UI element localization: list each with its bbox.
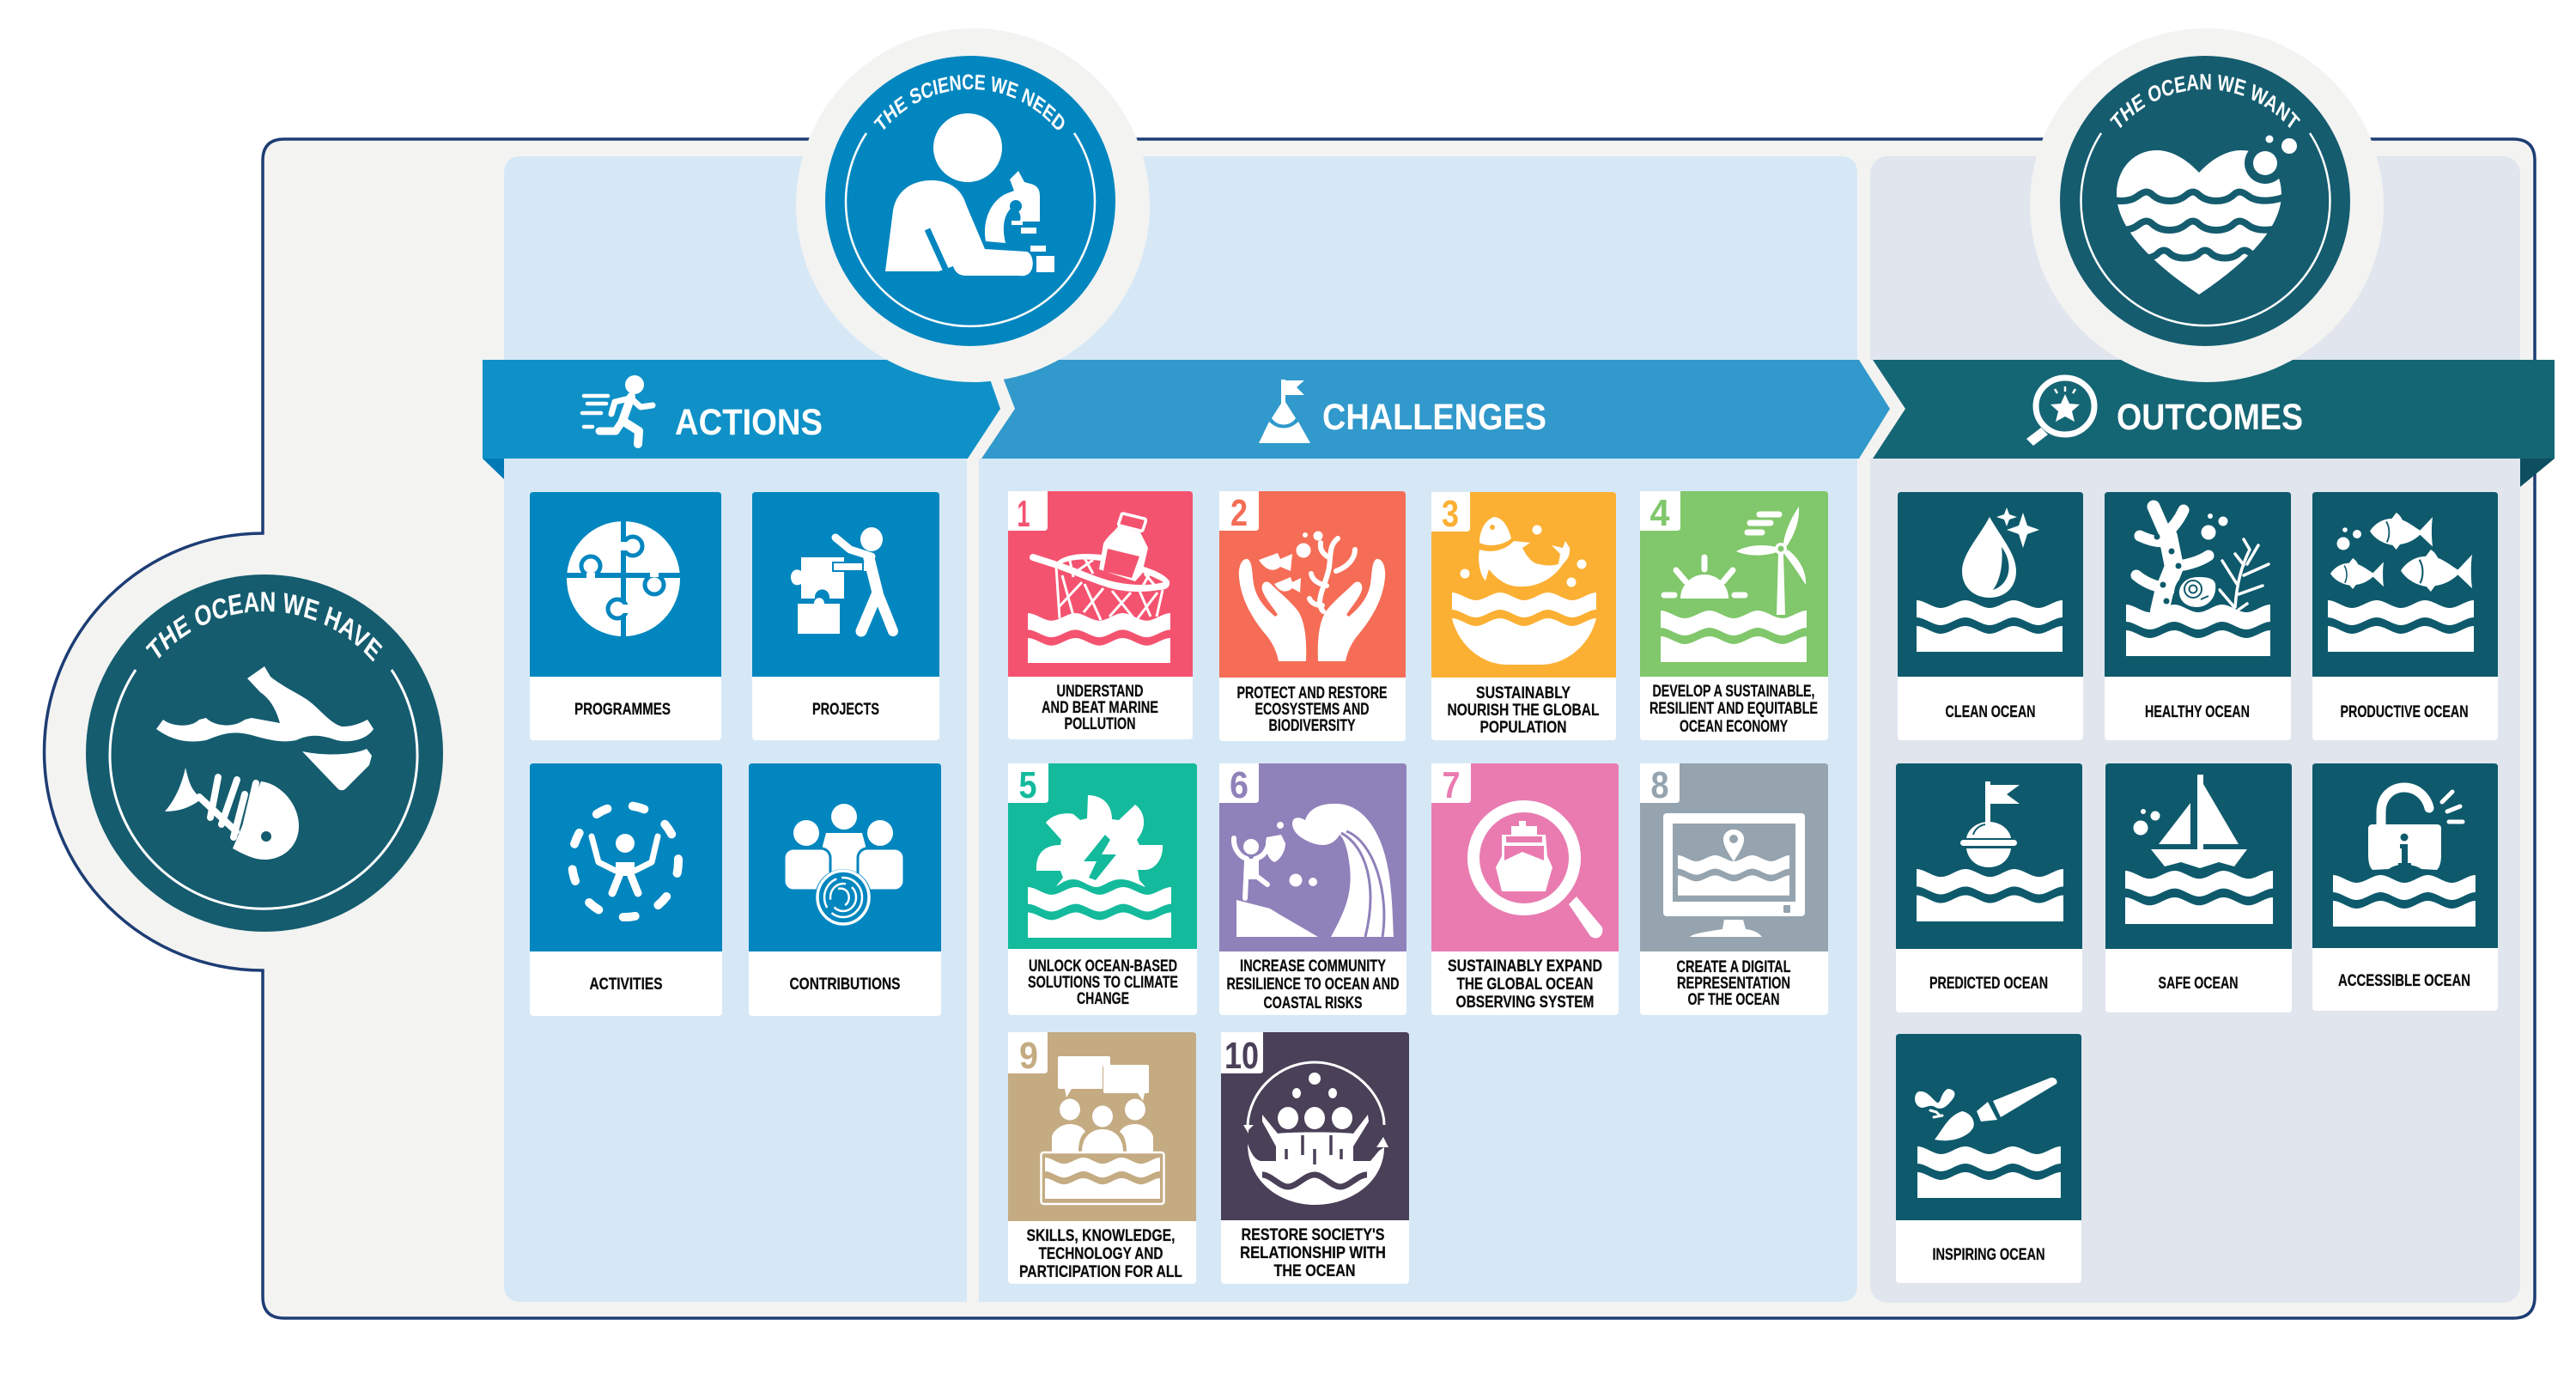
label: CHANGE — [1077, 990, 1129, 1008]
label: AND BEAT MARINE — [1042, 699, 1158, 717]
outcome: clean ocean — [1898, 492, 2083, 740]
text: the ocean we want: THE OCEAN WE WANT — [2110, 74, 2301, 129]
outcome: predicted ocean — [1896, 763, 2082, 1012]
label — [1448, 957, 1602, 1012]
outcome: productive ocean — [2312, 492, 2498, 740]
label: PRODUCTIVE OCEAN — [2341, 703, 2468, 721]
icon: person pushing puzzle pieces — [791, 527, 893, 634]
icon: fish — [2328, 513, 2474, 652]
heading: actions: ACTIONS — [675, 402, 823, 443]
label: RESILIENCE TO OCEAN AND — [1226, 976, 1400, 994]
outcome: safe ocean — [2105, 763, 2292, 1012]
label: OBSERVING SYSTEM — [1456, 994, 1594, 1012]
number 8 — [1640, 763, 1680, 806]
icon: big wave and person — [1234, 804, 1394, 937]
icon: monitor with map pin — [1663, 813, 1805, 937]
number 3 — [1431, 492, 1470, 535]
icon: sailing boat — [2125, 775, 2273, 924]
tile: activities — [530, 763, 722, 1016]
ribbon: actions — [483, 360, 1000, 479]
label: UNLOCK OCEAN-BASED — [1029, 957, 1177, 976]
icon: running person — [582, 375, 653, 444]
icon: water drop — [1917, 508, 2063, 652]
number 5 — [1008, 763, 1048, 806]
challenge 5: climate solutions — [1008, 763, 1197, 1015]
icon: bottle and fish bone — [156, 666, 374, 860]
label: projects: PROJECTS — [812, 701, 879, 719]
icon: buoy with flag — [1917, 781, 2063, 921]
outcome: accessible ocean — [2312, 763, 2498, 1011]
icon: puzzle circle — [562, 515, 684, 642]
panel: outcomes column — [1870, 156, 2520, 1303]
number 2 — [1219, 491, 1259, 534]
label: RESTORE SOCIETY'S — [1242, 1226, 1384, 1244]
label: SAFE OCEAN — [2159, 975, 2238, 993]
number 9 — [1008, 1032, 1048, 1077]
circle: the ocean we have — [86, 574, 443, 932]
icon: open padlock — [2333, 787, 2476, 927]
label: POLLUTION — [1065, 715, 1135, 733]
number 1 — [1008, 491, 1048, 535]
text: the ocean we have: THE OCEAN WE HAVE — [146, 592, 383, 661]
icon: ship in magnifier — [1473, 806, 1602, 938]
label: PREDICTED OCEAN — [1929, 975, 2048, 993]
outcome: healthy ocean — [2105, 492, 2291, 740]
icon: energy and leaves — [1028, 795, 1171, 938]
label: PROTECT AND RESTORE — [1236, 684, 1388, 702]
number 3: 3 — [1442, 493, 1459, 535]
icon: sun and wind turbine — [1661, 507, 1807, 662]
label: TECHNOLOGY AND — [1039, 1245, 1163, 1263]
number 7 — [1431, 763, 1471, 806]
icon: people in a circle of water — [1243, 1062, 1388, 1205]
icon: heart with waves — [2104, 136, 2297, 295]
challenge 10: society's relationship — [1221, 1032, 1409, 1284]
challenge 9: skills and knowledge — [1008, 1032, 1196, 1284]
label — [1676, 958, 1791, 1009]
label: UNDERSTAND — [1056, 683, 1144, 701]
icon: coral and shell — [2126, 507, 2270, 656]
icon: bottle in a net — [1028, 514, 1170, 663]
label: SUSTAINABLY — [1476, 684, 1571, 702]
label: DEVELOP A SUSTAINABLE, — [1652, 683, 1815, 701]
label: programmes: PROGRAMMES — [574, 701, 671, 719]
label: INSPIRING OCEAN — [1932, 1246, 2045, 1264]
ribbon gaps — [962, 360, 1910, 459]
label: SUSTAINABLY EXPAND — [1448, 957, 1602, 976]
heading: outcomes: OUTCOMES — [2117, 397, 2303, 438]
label: OF THE OCEAN — [1688, 991, 1779, 1009]
outcome: inspiring ocean — [1896, 1034, 2081, 1283]
label — [1019, 1227, 1182, 1281]
label: THE GLOBAL OCEAN — [1456, 976, 1594, 994]
icon: person in dashed circle — [572, 805, 678, 917]
number 6: 6 — [1230, 764, 1249, 806]
challenge 2: ecosystems — [1219, 491, 1406, 741]
icon: magnifier with star — [2026, 378, 2094, 446]
number 8: 8 — [1650, 764, 1669, 806]
label — [1448, 684, 1600, 737]
number 5: 5 — [1018, 764, 1037, 806]
label: COASTAL RISKS — [1264, 994, 1362, 1012]
label: PARTICIPATION FOR ALL — [1019, 1263, 1182, 1281]
challenge 3: nourish — [1431, 492, 1616, 740]
icon: paintbrush and splash — [1915, 1078, 2061, 1198]
number 4: 4 — [1650, 492, 1670, 534]
number 7: 7 — [1443, 764, 1460, 806]
icon: fish and bowl — [1452, 517, 1596, 665]
label: activities: ACTIVITIES — [589, 976, 663, 994]
label: BIODIVERSITY — [1269, 717, 1356, 735]
panel: actions and challenges column — [504, 156, 1857, 1302]
label: ACCESSIBLE OCEAN — [2338, 972, 2470, 990]
number 6 — [1219, 763, 1259, 806]
heading: challenges: CHALLENGES — [1322, 397, 1546, 438]
text: the science we need: THE SCIENCE WE NEED — [874, 74, 1065, 131]
label: RELATIONSHIP WITH — [1240, 1244, 1386, 1262]
icon: scientist at microscope — [885, 113, 1054, 277]
challenge 8: digital representation — [1640, 763, 1828, 1015]
label: OCEAN ECONOMY — [1680, 718, 1788, 736]
challenge 1: marine pollution — [1008, 491, 1193, 739]
tile: contributions — [749, 763, 941, 1016]
label — [1226, 957, 1400, 1012]
label: contributions: CONTRIBUTIONS — [790, 976, 900, 994]
icon: flag on a mountain — [1259, 380, 1310, 443]
label: CLEAN OCEAN — [1946, 703, 2035, 721]
ribbon: challenges — [981, 360, 1890, 459]
number 2: 2 — [1230, 492, 1248, 534]
label — [1028, 957, 1178, 1008]
number 10: 10 — [1224, 1035, 1259, 1077]
label — [1236, 684, 1388, 735]
label: THE OCEAN — [1274, 1262, 1355, 1280]
label: POPULATION — [1480, 719, 1566, 737]
tile: programmes — [530, 492, 721, 740]
challenge 4: ocean economy — [1640, 491, 1828, 740]
ribbon: outcomes — [1873, 360, 2555, 487]
number 1: 1 — [1017, 493, 1030, 535]
circle: the science we need — [796, 28, 1150, 382]
icon: people with fingerprint — [784, 804, 904, 926]
circle: the ocean we want — [2030, 28, 2384, 382]
icon: hands holding coral — [1239, 531, 1385, 661]
challenge 7: observing system — [1431, 763, 1619, 1015]
label: HEALTHY OCEAN — [2145, 703, 2250, 721]
label: CREATE A DIGITAL — [1676, 958, 1791, 976]
icon: people speaking above water — [1041, 1056, 1164, 1204]
label: SOLUTIONS TO CLIMATE — [1028, 974, 1178, 992]
label: RESILIENT AND EQUITABLE — [1649, 700, 1818, 718]
label — [1042, 683, 1158, 733]
challenge 6: community resilience — [1219, 763, 1406, 1015]
number 9: 9 — [1019, 1035, 1038, 1077]
label: INCREASE COMMUNITY — [1240, 957, 1386, 976]
label: ECOSYSTEMS AND — [1255, 701, 1369, 719]
number 4 — [1640, 491, 1680, 534]
label: REPRESENTATION — [1677, 975, 1790, 993]
tile: projects — [752, 492, 939, 740]
label: SKILLS, KNOWLEDGE, — [1027, 1227, 1175, 1245]
label — [1240, 1226, 1386, 1280]
label: NOURISH THE GLOBAL — [1448, 702, 1600, 720]
label — [1649, 683, 1818, 736]
